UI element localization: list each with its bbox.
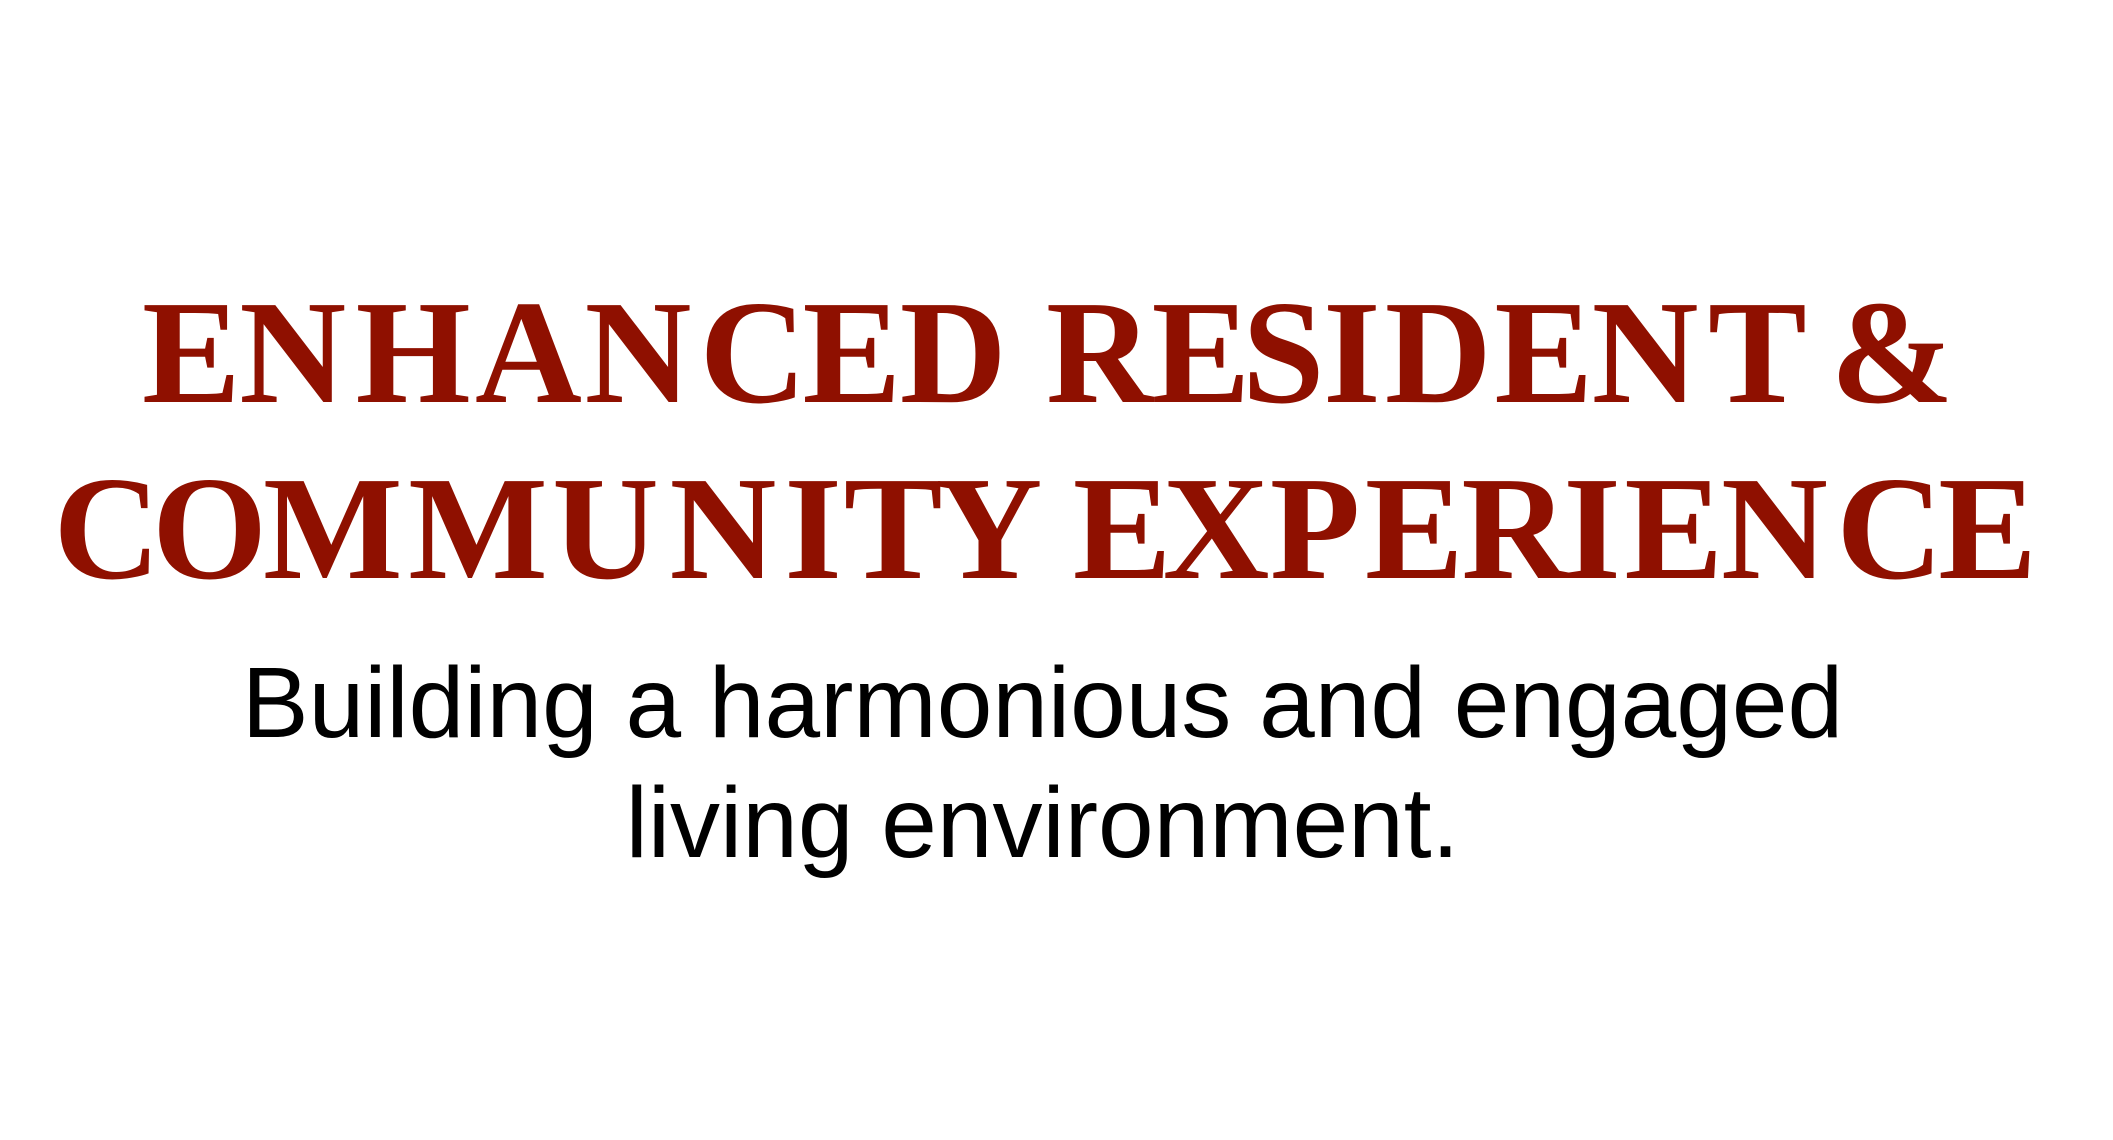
title: EXPERIENCE: [1073, 447, 2037, 611]
title: RESIDENT: [1046, 271, 1807, 435]
subtitle: Building a harmonious and engaged: [242, 647, 1843, 759]
title: [53, 271, 2037, 611]
subtitle: [242, 647, 1843, 879]
subtitle: living environment.: [626, 767, 1459, 879]
title: &: [1830, 271, 1954, 435]
title: COMMUNITY: [53, 447, 1042, 611]
title: ENHANCED: [142, 271, 1007, 435]
